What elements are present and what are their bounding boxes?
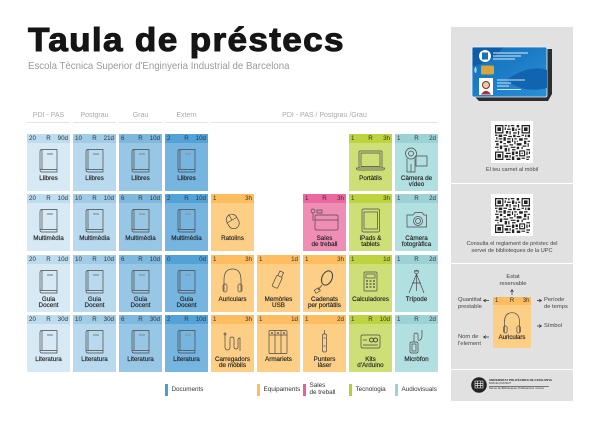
cell: Guia Docent Grau: 10d (150, 256, 160, 263)
cell: Memòries USB: 1d (291, 256, 298, 263)
caption: reglament: servei de biblioteques de la UPC (471, 248, 553, 254)
cell: Guia Docent Extern: Docent (177, 302, 196, 309)
cell: Multimèdia Postgrau (73, 194, 116, 251)
panel: key cell example: R (510, 298, 514, 304)
cell: Llibres PDI-PAS: 90d (58, 135, 68, 142)
cell: Kits d'Arduino: d'Arduino (357, 362, 384, 369)
cell: Multimèdia Extern: 2 (167, 195, 170, 202)
column heading: PDI - PAS: PDI - PAS (33, 112, 64, 118)
cell: Calculadores: 1d (383, 256, 390, 263)
cell: Llibres Grau: Llibres (131, 174, 150, 182)
cell: Literatura Extern: 10d (196, 316, 206, 323)
cell: Multimèdia Postgrau: 10 (75, 195, 82, 202)
cell: Calculadores: Calculadores (352, 296, 389, 302)
cell: Llibres Extern: 10d (196, 135, 206, 142)
cell: Guia Docent Grau: Docent (131, 302, 150, 309)
panel: key cell example (493, 297, 531, 348)
cell: Multimèdia PDI-PAS: Multimèdia (33, 235, 64, 242)
cell: Carregadors de mòbils: 3h (245, 316, 252, 323)
cell: Auriculars: Auriculars (218, 296, 246, 302)
legend: Equipaments (257, 384, 300, 396)
caption: reglament: Consulta el reglament de préstec del (466, 240, 558, 246)
cell: iPads & tablets: 1 (351, 195, 354, 202)
cell: Sales de treball: de treball (312, 241, 337, 248)
annotation: Període de temps: de temps (544, 304, 568, 310)
cell: Guia Docent Grau: R (138, 256, 143, 263)
panel: key cell example: 1 (495, 298, 498, 304)
cell: Multimèdia PDI-PAS: 10d (58, 195, 68, 202)
cell: Multimèdia Grau: R (138, 195, 143, 202)
panel: key cell example: Auriculars (499, 334, 525, 340)
logo: UPC: BARCELONATECH (489, 382, 511, 385)
cell: iPads & tablets: 3h (383, 195, 390, 202)
legend: Audiovisuals (395, 384, 437, 396)
cell: Calculadores (349, 255, 392, 312)
cell: Guia Docent PDI-PAS: Guia (42, 296, 55, 302)
cell: Sales de treball (303, 194, 346, 251)
cell: Guia Docent PDI-PAS: 20 (29, 256, 36, 263)
cell: Literatura PDI-PAS: 20 (29, 316, 36, 323)
cell: Guia Docent Extern: 0d (199, 256, 206, 263)
cell: Guia Docent Postgrau: 10 (75, 256, 82, 263)
logo: UPC: UNIVERSITAT POLITÈCNICA DE CATALUNYA (489, 378, 552, 382)
cell: Multimèdia Postgrau: 10d (104, 195, 114, 202)
cell: Portàtils: 1 (351, 135, 354, 142)
cell: Multimèdia Grau (119, 194, 162, 251)
cell: Micròfon (395, 315, 438, 372)
cell: Multimèdia Extern: Multimèdia (171, 235, 202, 242)
cell: Llibres Postgrau: 10 (75, 135, 82, 142)
annotation: Quantitat prestable (458, 297, 482, 310)
cell: Cadenats per portàtils (303, 255, 346, 312)
cell: Carregadors de mòbils: de mòbils (219, 362, 246, 369)
cell: Guia Docent PDI-PAS: Docent (39, 302, 58, 309)
annotation: Quantitat prestable: prestable (458, 304, 482, 310)
cell: Guia Docent Grau: Guia (134, 296, 147, 302)
cell: Literatura Grau: R (138, 316, 143, 323)
cell: Memòries USB: 1 (259, 256, 262, 263)
legend: Sales de treball: de treball (310, 389, 335, 396)
cell: Armariets: 1 (259, 316, 262, 323)
cell: Multimèdia Postgrau: R (92, 195, 97, 202)
cell: Guia Docent Postgrau: Guia (88, 296, 101, 302)
annotation: Nom de l'element: l'element (458, 341, 481, 347)
cell: Trípode: 1 (397, 256, 400, 263)
cell: Literatura Postgrau: 10 (75, 316, 82, 323)
arrows (483, 289, 542, 339)
annotation: Període de temps: Període (544, 297, 564, 303)
cell: Llibres Postgrau: 21d (104, 135, 114, 142)
cell: Trípode (395, 255, 438, 312)
cell: Càmera fotogràfica: R (414, 195, 419, 202)
cell: Ratolins: 3h (245, 195, 252, 202)
cell: Càmera de vídeo (395, 134, 438, 191)
annotation: Període de temps (544, 297, 568, 310)
cell: Armariets (257, 315, 300, 372)
cell: Guia Docent Postgrau: 10d (104, 256, 114, 263)
QR code: reglament de préstec (491, 194, 533, 236)
cell: Guia Docent Postgrau (73, 255, 116, 312)
cell: Auriculars: 1 (213, 256, 216, 263)
cell: Cadenats per portàtils: Cadenats (311, 296, 338, 302)
cell: Kits d'Arduino: 10d (380, 316, 390, 323)
annotation: Símbol: Símbol (544, 323, 562, 329)
caption: reglament (466, 240, 558, 254)
cell: Auriculars: 3h (245, 256, 252, 263)
cell: Carregadors de mòbils: 1 (213, 316, 216, 323)
cell: Càmera de vídeo: vídeo (409, 181, 424, 188)
cell: Armariets: Armariets (265, 356, 292, 363)
cell: Memòries USB (257, 255, 300, 312)
legend: Tecnologia: Tecnologia (356, 386, 386, 392)
cell: Literatura Extern: 2 (167, 316, 170, 323)
cell: Llibres Extern: 2 (167, 135, 170, 142)
cell: iPads & tablets: iPads & (360, 235, 381, 242)
cell: Càmera fotogràfica (395, 194, 438, 251)
legend: Audiovisuals: Audiovisuals (402, 386, 437, 392)
cell: Llibres Extern: Llibres (177, 174, 196, 182)
cell: Carregadors de mòbils: Carregadors (215, 356, 250, 363)
cell: Trípode: 2d (429, 256, 436, 263)
cell: Ratolins: Ratolins (221, 235, 244, 242)
cell: Càmera de vídeo: Càmera de (401, 174, 432, 182)
cell: Guia Docent Grau: 6 (121, 256, 124, 263)
cell: Portàtils: Portàtils (359, 174, 382, 182)
cell: Multimèdia Extern (165, 194, 208, 251)
cell: Llibres Postgrau: Llibres (85, 174, 104, 182)
cell: Llibres PDI-PAS: 20 (29, 135, 36, 142)
cell: Literatura PDI-PAS: Literatura (35, 356, 62, 363)
cell: Cadenats per portàtils: 1 (305, 256, 308, 263)
QR code: carnet al mòbil (491, 121, 533, 163)
cell: Literatura Postgrau: Literatura (81, 356, 108, 363)
cell: Portàtils: 3h (383, 135, 390, 142)
cell: Literatura Extern: R (184, 316, 189, 323)
cell: Multimèdia PDI-PAS: 20 (29, 195, 36, 202)
cell: Guia Docent Extern: 0 (167, 256, 170, 263)
logo: UPC (471, 377, 552, 393)
cell: Llibres PDI-PAS (27, 134, 70, 191)
cell: Guia Docent Extern (165, 255, 208, 312)
cell: Ratolins: 1 (213, 195, 216, 202)
cell: Llibres Postgrau (73, 134, 116, 191)
cell: Guia Docent Extern: Guia (180, 296, 193, 302)
annotation: Estat reservable: Estat (506, 274, 520, 280)
cell: Literatura Postgrau (73, 315, 116, 372)
cell: Guia Docent PDI-PAS (27, 255, 70, 312)
cell: Carregadors de mòbils (211, 315, 254, 372)
cell: Punters làser: 2d (337, 316, 344, 323)
cell: Sales de treball: R (322, 195, 327, 202)
annotation: Estat reservable: reservable (499, 281, 527, 287)
cell: Sales de treball: 1 (305, 195, 308, 202)
cell: Micròfon: R (414, 316, 419, 323)
cell: Punters làser (303, 315, 346, 372)
cell: Literatura Grau: Literatura (127, 356, 154, 363)
cell: Guia Docent Postgrau: R (92, 256, 97, 263)
cell: Micròfon: 1 (397, 316, 400, 323)
cell: Llibres Extern (165, 134, 208, 191)
cell: Càmera fotogràfica: fotogràfica (402, 241, 431, 248)
cell: Punters làser: 1 (305, 316, 308, 323)
cell: Càmera fotogràfica: 1 (397, 195, 400, 202)
cell: Armariets: 1d (291, 316, 298, 323)
cell: Micròfon: 2d (429, 316, 436, 323)
cell: Sales de treball: 3h (337, 195, 344, 202)
cell: Llibres Extern: R (184, 135, 189, 142)
cell: Portàtils (349, 134, 392, 191)
legend: Equipaments: Equipaments (264, 386, 300, 392)
column heading: Postgrau: Postgrau (80, 112, 109, 118)
cell: Llibres Grau: 6 (121, 135, 124, 142)
cell: Memòries USB: USB (272, 302, 285, 309)
cell: Multimèdia Extern: R (184, 195, 189, 202)
cell: Literatura PDI-PAS: R (46, 316, 51, 323)
cell: Kits d'Arduino (349, 315, 392, 372)
cell: Cadenats per portàtils: per portàtils (308, 302, 341, 309)
cell: Literatura Grau: 6 (121, 316, 124, 323)
cell: Memòries USB: Memòries (265, 296, 292, 302)
cell: Portàtils: R (368, 135, 373, 142)
cell: Trípode: R (414, 256, 419, 263)
cell: Càmera de vídeo: 1 (397, 135, 400, 142)
annotation: Estat reservable (499, 274, 527, 287)
annotation: Nom de l'element: Nom de (458, 334, 478, 340)
cell: Multimèdia PDI-PAS (27, 194, 70, 251)
cell: Literatura Extern: Literatura (173, 356, 200, 363)
cell: Trípode: Trípode (406, 296, 427, 302)
cell: Micròfon: Micròfon (404, 356, 429, 363)
cell: Càmera de vídeo: R (414, 135, 419, 142)
cell: Auriculars (211, 255, 254, 312)
cell: Literatura Postgrau: 30d (104, 316, 114, 323)
cell: Punters làser: làser (318, 362, 331, 369)
legend: Tecnologia (349, 384, 386, 396)
caption: carnet: El teu carnet al mòbil (486, 166, 538, 172)
cell: Kits d'Arduino: Kits (365, 356, 376, 363)
cell: Multimèdia Grau: 6 (121, 195, 124, 202)
cell: Multimèdia Extern: 10d (196, 195, 206, 202)
panel: sidebar (451, 27, 573, 401)
subtitle: Escola Tècnica Superior d'Enginyeria Industrial de Barcelona (28, 60, 289, 72)
cell: Llibres Grau (119, 134, 162, 191)
cell: Literatura Grau (119, 315, 162, 372)
cell: Llibres Grau: R (138, 135, 143, 142)
cell: Literatura Postgrau: R (92, 316, 97, 323)
icon: university card (472, 46, 552, 101)
cell: Calculadores: 1 (351, 256, 354, 263)
column heading: Extern: Extern (176, 112, 197, 118)
cell: Multimèdia Grau: Multimèdia (125, 235, 156, 242)
cell: iPads & tablets: tablets (361, 241, 380, 248)
cell: Guia Docent Grau (119, 255, 162, 312)
cell: Literatura PDI-PAS (27, 315, 70, 372)
cell: Càmera fotogràfica: Càmera (405, 235, 428, 242)
annotation: Quantitat prestable: Quantitat (458, 297, 482, 303)
cell: Literatura Extern (165, 315, 208, 372)
cell: Multimèdia Grau: 10d (150, 195, 160, 202)
legend: Documents: Documents (172, 386, 203, 392)
legend: Documents (165, 384, 204, 396)
cell: Guia Docent PDI-PAS: R (46, 256, 51, 263)
annotation: Nom de l'element (458, 334, 481, 347)
cell: Càmera de vídeo: 2d (429, 135, 436, 142)
cell: Sales de treball: Sales (317, 235, 332, 242)
cell: Kits d'Arduino: R (368, 316, 373, 323)
cell: Multimèdia Postgrau: Multimèdia (79, 235, 110, 242)
column heading: PDI - PAS / Postgrau / Grau: PDI - PAS / Postgrau /Grau (282, 112, 367, 118)
cell: Multimèdia PDI-PAS: R (46, 195, 51, 202)
panel: key cell example: 3h (523, 298, 530, 304)
logo: UPC: Servei de Biblioteques, Publicacions i Arxius (489, 386, 544, 390)
cell: Càmera fotogràfica: 2d (429, 195, 436, 202)
legend: Sales de treball: Sales (310, 382, 325, 389)
cell: Llibres PDI-PAS: R (46, 135, 51, 142)
cell: Literatura Grau: 30d (150, 316, 160, 323)
cell: Literatura PDI-PAS: 30d (58, 316, 68, 323)
cell: iPads & tablets (349, 194, 392, 251)
cell: Guia Docent PDI-PAS: 10d (58, 256, 68, 263)
cell: Kits d'Arduino: 1 (351, 316, 354, 323)
column heading: Grau: Grau (133, 112, 148, 118)
cell: Cadenats per portàtils: 3h (337, 256, 344, 263)
cell: Ratolins (211, 194, 254, 251)
cell: Llibres Grau: 10d (150, 135, 160, 142)
legend: Sales de treball (303, 382, 335, 396)
cell: Guia Docent Postgrau: Docent (85, 302, 104, 309)
cell: Llibres PDI-PAS: Llibres (39, 174, 58, 182)
cell: Punters làser: Punters (314, 356, 335, 363)
cell: Llibres Postgrau: R (92, 135, 97, 142)
title: Taula de préstecs (28, 22, 345, 59)
